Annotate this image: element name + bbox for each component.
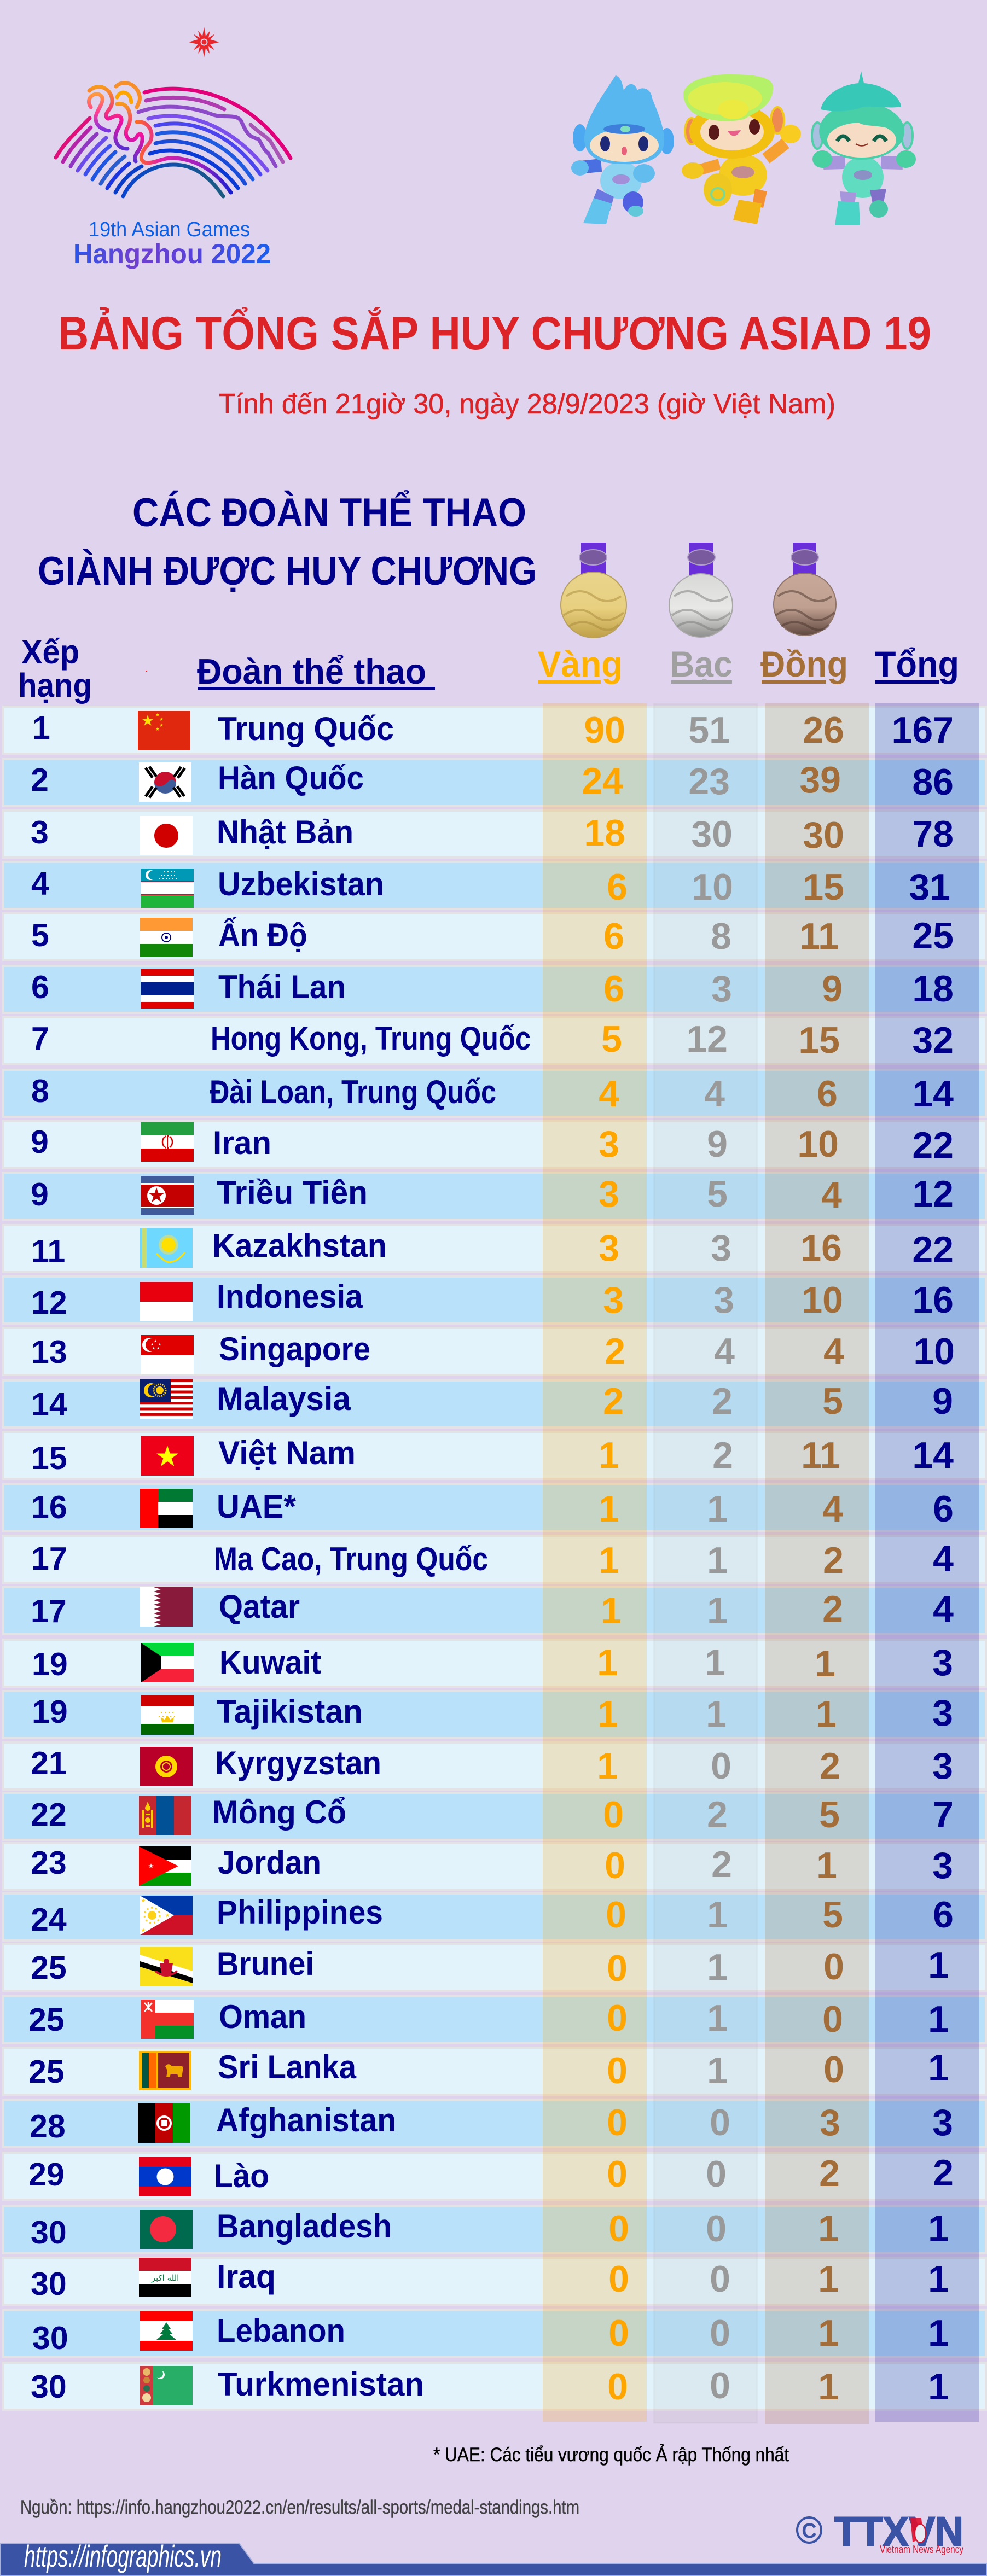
table row: Iraq: 0 <box>608 2258 629 2300</box>
table row: Singapore <box>31 1331 955 1374</box>
table row: Iran: Iran <box>213 1124 271 1161</box>
table row: Ấn Độ: 25 <box>912 915 954 957</box>
table row: Turkmenistan: 30 <box>31 2369 67 2405</box>
table row: Bangladesh: 1 <box>928 2208 949 2249</box>
table row: Afghanistan: 0 <box>710 2102 730 2143</box>
table row: Iraq: 1 <box>928 2258 949 2300</box>
table row: Việt Nam <box>31 1435 954 1476</box>
table row: Triều Tiên <box>31 1173 954 1216</box>
table row: Kyrgyzstan: 1 <box>597 1745 618 1787</box>
table row: Lào <box>28 2152 954 2196</box>
table row: UAE: 1 <box>599 1488 619 1530</box>
table row: Jordan: 3 <box>932 1845 953 1886</box>
icon: flag of Kazakhstan <box>140 1228 193 1268</box>
table row: Kyrgyzstan: 0 <box>711 1745 731 1787</box>
table row: Tajikistan: 1 <box>597 1693 618 1735</box>
table row: Đài Loan, Trung Quốc: Đài Loan, Trung Quốc <box>210 1074 496 1110</box>
table row: Ma Cao, Trung Quốc: 4 <box>933 1538 954 1580</box>
table row: Nhật Bản: 78 <box>912 813 954 855</box>
table row: Malaysia <box>31 1379 953 1423</box>
table row: Oman: 1 <box>928 1998 949 2040</box>
table row: UAE: 6 <box>933 1488 954 1530</box>
table row: Trung Quốc: 26 <box>803 709 844 751</box>
table row: Hong Kong, Trung Quốc <box>31 1018 954 1061</box>
icon: flag of Lebanon <box>140 2311 193 2351</box>
table row: UAE: 16 <box>31 1489 67 1525</box>
table row: Kazakhstan <box>31 1227 954 1270</box>
table row: Brunei: Brunei <box>217 1945 314 1982</box>
icon: flag of Mongolia <box>139 1796 191 1835</box>
table row: UAE: 4 <box>822 1488 843 1530</box>
table row: Sri Lanka: 1 <box>707 2050 728 2091</box>
table row: Kuwait: 1 <box>597 1642 618 1683</box>
icon: blue mascot <box>571 75 674 224</box>
table row: Afghanistan: 28 <box>30 2108 66 2144</box>
table row: Qatar: 1 <box>601 1590 622 1631</box>
icon: flag of Oman <box>141 2000 194 2039</box>
table row: Ấn Độ: 6 <box>603 916 624 957</box>
table row: Triều Tiên: 4 <box>821 1174 842 1216</box>
table row: Hàn Quốc: 2 <box>31 762 49 798</box>
table row: Philippines: 0 <box>606 1894 626 1936</box>
table row: Kyrgyzstan: 2 <box>820 1745 840 1787</box>
table row: Hong Kong, Trung Quốc: 5 <box>601 1018 622 1060</box>
table row: Oman: 0 <box>607 1997 628 2039</box>
icon: bronze medal <box>774 543 836 636</box>
table row: Đài Loan, Trung Quốc: 8 <box>31 1073 49 1109</box>
table row: Ma Cao, Trung Quốc: 2 <box>823 1540 844 1581</box>
table row: Afghanistan: 0 <box>607 2102 628 2143</box>
table row: Malaysia: 14 <box>31 1386 67 1423</box>
table row: Trung Quốc <box>32 709 954 751</box>
table row: Brunei: 0 <box>823 1946 844 1988</box>
table row: Trung Quốc: 1 <box>32 710 50 746</box>
column band: gold <box>543 703 647 2422</box>
table row: Kuwait: 3 <box>932 1642 953 1683</box>
logo: Hangzhou 2022 <box>56 83 291 269</box>
table row: Jordan: 23 <box>31 1845 67 1881</box>
table row: Đài Loan, Trung Quốc: 4 <box>599 1073 619 1115</box>
heading: participating delegations: GIÀNH ĐƯỢC HUY CHƯƠNG <box>38 549 537 593</box>
table row: Turkmenistan: 0 <box>710 2365 730 2406</box>
table row: Nhật Bản: 3 <box>31 814 49 850</box>
icon: flag of Kuwait <box>141 1643 194 1682</box>
column header: rank: hạng <box>18 667 92 704</box>
table row: Qatar: 4 <box>933 1588 954 1630</box>
table row: Singapore: 4 <box>714 1331 735 1372</box>
table row: Hàn Quốc: 24 <box>582 760 623 802</box>
table row: Mông Cổ: 7 <box>933 1794 954 1835</box>
icon: flag of Brunei <box>140 1947 193 1986</box>
table row: Jordan: 1 <box>816 1845 837 1886</box>
table row: Lào: 2 <box>933 2152 954 2194</box>
icon: flag of Qatar <box>140 1587 193 1627</box>
table row backgrounds <box>3 707 986 2410</box>
icon: flag of Afghanistan <box>138 2103 190 2143</box>
table row: Kazakhstan: 11 <box>31 1233 65 1269</box>
logo: TTXVN: Vietnam News Agency <box>880 2544 963 2556</box>
table row: Thái Lan: 6 <box>603 968 624 1010</box>
table row: Iraq: 30 <box>31 2266 67 2302</box>
table row: Mông Cổ: Mông Cổ <box>212 1794 346 1831</box>
table row: Tajikistan: 19 <box>32 1694 68 1730</box>
table row: Qatar: 17 <box>31 1593 67 1629</box>
table row: Philippines: 5 <box>822 1894 843 1936</box>
table row: Lebanon: 0 <box>608 2312 629 2354</box>
logo: Hangzhou 2022: 19th Asian Games <box>89 218 250 241</box>
table row: Jordan: 2 <box>711 1844 732 1885</box>
table row: Turkmenistan <box>31 2365 949 2408</box>
table row: Lào: 0 <box>607 2153 628 2195</box>
table row: Mông Cổ <box>31 1794 954 1835</box>
column header: rank: Xếp <box>21 633 79 671</box>
icon: flag of Iraq <box>139 2258 191 2297</box>
table row: Sri Lanka: Sri Lanka <box>218 2049 357 2085</box>
table row: Malaysia: Malaysia <box>217 1380 351 1417</box>
table row: Nhật Bản: Nhật Bản <box>217 814 353 850</box>
footnote: UAE: * UAE: Các tiểu vương quốc Ả rập Thống nhất <box>433 2444 789 2466</box>
table row: Kazakhstan: 3 <box>599 1227 619 1269</box>
icon: flag of Kyrgyzstan <box>140 1747 193 1786</box>
table row: Uzbekistan: 4 <box>31 866 49 902</box>
icon: flag of Japan <box>140 816 193 855</box>
table row: Hàn Quốc: Hàn Quốc <box>218 760 364 796</box>
table row: Trung Quốc: 51 <box>688 709 730 751</box>
table row: Sri Lanka: 25 <box>28 2054 65 2090</box>
table row: Bangladesh: 0 <box>706 2208 727 2249</box>
table row: Oman: 0 <box>822 1998 843 2040</box>
table row: Kazakhstan: 22 <box>912 1229 954 1270</box>
table row: Iran: 3 <box>599 1123 619 1165</box>
table row: Uzbekistan: 15 <box>803 866 844 908</box>
table row: Iran: 22 <box>912 1124 954 1166</box>
icon: flag of Bangladesh <box>140 2210 193 2249</box>
table row: Ma Cao, Trung Quốc: 17 <box>31 1541 67 1577</box>
icon: flag of South Korea <box>139 762 191 802</box>
table row: Mông Cổ: 0 <box>603 1794 624 1835</box>
table row: Triều Tiên: Triều Tiên <box>217 1174 368 1211</box>
table row: Iraq: 1 <box>818 2258 839 2300</box>
table row: Turkmenistan: Turkmenistan <box>218 2366 424 2403</box>
table row: Lào: Lào <box>214 2158 269 2194</box>
table row: Brunei <box>31 1944 949 1989</box>
table row: Việt Nam: 11 <box>801 1435 840 1476</box>
table row: Singapore: 4 <box>823 1331 844 1372</box>
table row: Ma Cao, Trung Quốc: Ma Cao, Trung Quốc <box>214 1541 488 1577</box>
table row: Tajikistan <box>32 1692 953 1735</box>
column band: silver <box>654 704 757 2423</box>
source line: Nguồn: https://info.hangzhou2022.cn/en/results/all-sports/medal-standings.htm <box>20 2497 579 2518</box>
table row: Jordan <box>31 1844 953 1886</box>
column header: delegation: Đoàn thể thao <box>197 651 426 691</box>
icon: flag of Uzbekistan <box>141 869 194 908</box>
icon: flag of Vietnam <box>141 1436 194 1476</box>
table row: Lào: 0 <box>706 2153 727 2195</box>
table row: Thái Lan <box>31 968 954 1010</box>
icon: flag of Thailand <box>141 969 194 1009</box>
table row: Hong Kong, Trung Quốc: Hong Kong, Trung Quốc <box>211 1020 531 1057</box>
table row: Nhật Bản: 18 <box>584 812 625 854</box>
table row: Kuwait <box>32 1642 953 1685</box>
table row: Ấn Độ: Ấn Độ <box>218 917 307 953</box>
table row: Brunei: 1 <box>707 1946 728 1988</box>
red dot artifact <box>146 671 147 672</box>
table row: Afghanistan <box>30 2102 953 2144</box>
table row: Kuwait: 1 <box>815 1643 835 1685</box>
table row: Lebanon: Lebanon <box>217 2312 345 2349</box>
table row: Kazakhstan: 3 <box>711 1227 731 1269</box>
table row: Ma Cao, Trung Quốc: 1 <box>599 1540 619 1581</box>
table row: Hong Kong, Trung Quốc: 32 <box>912 1019 954 1061</box>
table row: Iraq <box>31 2258 949 2302</box>
table row: Sri Lanka: 1 <box>928 2047 949 2089</box>
table row: Uzbekistan <box>31 866 950 908</box>
table row: Bangladesh: 30 <box>31 2214 67 2251</box>
table row: Lebanon: 1 <box>928 2312 949 2354</box>
table row: Thái Lan: Thái Lan <box>218 969 346 1005</box>
table row: Mông Cổ: 5 <box>819 1794 840 1835</box>
table row: Hàn Quốc: 23 <box>688 761 730 802</box>
table row: Triều Tiên: 3 <box>599 1173 619 1215</box>
table row: Ấn Độ: 5 <box>31 917 49 953</box>
table row: Turkmenistan: 1 <box>818 2366 839 2408</box>
column band: total <box>875 703 979 2422</box>
icon: flag of Laos <box>139 2157 191 2196</box>
column header: gold: Vàng <box>538 644 623 684</box>
table row: Lebanon <box>32 2311 949 2356</box>
table row: Uzbekistan: 10 <box>692 866 733 908</box>
column header: total: Tổng <box>875 644 959 684</box>
table row: Đài Loan, Trung Quốc: 6 <box>817 1073 838 1115</box>
table row: Malaysia: 2 <box>712 1380 733 1422</box>
table row: Lào: 29 <box>28 2157 65 2193</box>
icon: flag of Turkmenistan <box>140 2366 193 2405</box>
table row: Hàn Quốc: 39 <box>799 759 841 801</box>
table row: Kuwait: 1 <box>705 1642 725 1683</box>
table row: Sri Lanka: 0 <box>823 2049 844 2090</box>
table row: Kazakhstan: 16 <box>800 1227 842 1269</box>
table row: Brunei: 0 <box>607 1948 628 1989</box>
table row: Kyrgyzstan: 3 <box>932 1745 953 1787</box>
table row: Qatar: 2 <box>822 1588 843 1630</box>
table row: Turkmenistan: 1 <box>928 2366 949 2408</box>
table row: Indonesia: 3 <box>603 1279 624 1321</box>
table row: Triều Tiên: 12 <box>912 1173 954 1215</box>
table row: Lào: 2 <box>819 2153 840 2194</box>
table row: Đài Loan, Trung Quốc <box>31 1073 954 1115</box>
icon: flag of Tajikistan <box>141 1695 194 1735</box>
table row: Nhật Bản: 30 <box>691 813 733 855</box>
table row: Ma Cao, Trung Quốc <box>31 1538 954 1581</box>
icon: flag of Malaysia <box>140 1379 193 1419</box>
table row: Singapore: Singapore <box>219 1331 370 1367</box>
table row: Nhật Bản <box>31 812 954 856</box>
table row: Việt Nam: 14 <box>912 1435 954 1476</box>
table row: Philippines: Philippines <box>217 1894 383 1931</box>
logo: Hangzhou 2022: Hangzhou 2022 <box>73 238 271 269</box>
table row: Philippines: 24 <box>31 1902 67 1938</box>
table row: Philippines <box>31 1894 954 1938</box>
column band: bronze <box>765 703 869 2424</box>
table row: Qatar: Qatar <box>219 1588 300 1625</box>
table row: Ấn Độ <box>31 915 954 957</box>
icon: flag of India <box>140 918 193 957</box>
table row: Oman: Oman <box>219 1998 306 2035</box>
table row: Iran <box>31 1122 954 1166</box>
table row: Oman: 1 <box>707 1997 728 2039</box>
table row: Kyrgyzstan: 21 <box>31 1745 67 1781</box>
table row: Iran: 9 <box>31 1124 49 1160</box>
table row: Malaysia: 5 <box>822 1380 843 1422</box>
table row: UAE <box>31 1488 954 1530</box>
table row: Indonesia <box>31 1278 954 1321</box>
table row: Thái Lan: 9 <box>822 968 843 1010</box>
column header: silver: Bạc <box>670 644 733 684</box>
table row: Iran: 10 <box>797 1123 839 1165</box>
table row: Mông Cổ: 2 <box>707 1794 728 1835</box>
table row: Việt Nam: 1 <box>599 1435 619 1476</box>
table row: Đài Loan, Trung Quốc: 14 <box>912 1073 954 1115</box>
heading: participating delegations: CÁC ĐOÀN THỂ THAO <box>132 491 526 535</box>
table row: Hong Kong, Trung Quốc: 7 <box>31 1021 49 1057</box>
table row: Trung Quốc: 167 <box>892 709 954 751</box>
table row: Nhật Bản: 30 <box>803 814 844 856</box>
icon: green mascot <box>812 71 916 225</box>
table row: Thái Lan: 3 <box>711 968 732 1010</box>
table row: Brunei: 25 <box>31 1950 67 1986</box>
table row: Ấn Độ: 11 <box>799 916 839 957</box>
table row: Việt Nam: 2 <box>712 1435 733 1476</box>
table row: Tajikistan: 3 <box>932 1692 953 1734</box>
table row: Bangladesh: Bangladesh <box>217 2208 392 2245</box>
table row: Iraq: 0 <box>710 2258 730 2300</box>
table row: Lebanon: 1 <box>818 2312 839 2354</box>
table row: Bangladesh <box>31 2208 949 2251</box>
table row: Philippines: 6 <box>933 1894 954 1936</box>
table row: Lebanon: 0 <box>710 2312 730 2354</box>
table row: Oman <box>28 1997 949 2040</box>
table row: Kuwait: Kuwait <box>219 1644 321 1681</box>
icon: gold medal <box>561 543 626 638</box>
table row: Triều Tiên: 5 <box>707 1173 728 1215</box>
table row: Qatar: 1 <box>707 1590 728 1631</box>
table row: Lebanon: 30 <box>32 2320 68 2356</box>
table row: Iran: 9 <box>707 1123 728 1165</box>
table row: Iraq: Iraq <box>217 2258 276 2295</box>
table row: Bangladesh: 1 <box>818 2208 839 2249</box>
icon: flag of North Korea <box>141 1176 194 1215</box>
column header: rank <box>18 633 92 704</box>
icon: flag of Sri Lanka <box>139 2051 191 2090</box>
table row: Bangladesh: 0 <box>608 2208 629 2249</box>
table row: Việt Nam: 15 <box>31 1440 67 1476</box>
heading: participating delegations <box>38 491 537 593</box>
table row: Malaysia: 9 <box>932 1380 953 1422</box>
table row: Hong Kong, Trung Quốc: 12 <box>686 1018 728 1060</box>
table row: Sri Lanka: 0 <box>607 2050 628 2091</box>
table row: Jordan: 0 <box>605 1845 625 1886</box>
icon: silver medal <box>669 543 733 637</box>
table row: Hàn Quốc <box>31 759 954 803</box>
table row: Uzbekistan: 31 <box>909 866 950 908</box>
table row: Việt Nam: Việt Nam <box>218 1435 356 1471</box>
table row: Uzbekistan: Uzbekistan <box>218 866 384 902</box>
table row: Singapore: 10 <box>913 1331 955 1372</box>
table row: Indonesia: 3 <box>713 1279 734 1321</box>
table row: Đài Loan, Trung Quốc: 4 <box>704 1073 725 1115</box>
table row: Hong Kong, Trung Quốc: 15 <box>798 1019 840 1061</box>
table row: Philippines: 1 <box>707 1894 728 1936</box>
icon: flag of the Philippines <box>140 1896 193 1935</box>
logo: TTXVN: C <box>802 2520 817 2543</box>
table row: Uzbekistan: 6 <box>607 866 628 908</box>
table row: Kyrgyzstan: Kyrgyzstan <box>215 1745 381 1781</box>
table row: Jordan: Jordan <box>218 1844 321 1881</box>
table row: Sri Lanka <box>28 2047 949 2091</box>
table row: Thái Lan: 6 <box>31 969 49 1005</box>
table row: Turkmenistan: 0 <box>607 2366 628 2408</box>
table row: Brunei: 1 <box>928 1944 949 1986</box>
table row: UAE: UAE* <box>217 1488 297 1525</box>
table row: Tajikistan: 1 <box>706 1693 727 1735</box>
icon: Asian Games sun emblem <box>189 27 219 57</box>
footer bar: https://infographics.vn <box>24 2539 222 2573</box>
table row: Trung Quốc: 90 <box>584 709 625 751</box>
icon: flag of Singapore <box>141 1335 194 1374</box>
table row: Indonesia: 10 <box>802 1279 843 1321</box>
icon: flag of Iran <box>141 1122 194 1162</box>
icon: yellow mascot <box>682 74 801 224</box>
table row: Ma Cao, Trung Quốc: 1 <box>707 1540 728 1581</box>
table row: UAE: 1 <box>707 1488 728 1530</box>
table row: Afghanistan: 3 <box>932 2102 953 2143</box>
table row: Kazakhstan: Kazakhstan <box>212 1227 387 1264</box>
footer bar <box>0 2539 987 2576</box>
table row: Tajikistan: 1 <box>816 1693 837 1735</box>
table row: Indonesia: Indonesia <box>217 1278 363 1315</box>
icon: flag of Iraq: الله اكبر <box>151 2273 179 2283</box>
table row: Trung Quốc: Trung Quốc <box>218 710 394 747</box>
table row: Malaysia: 2 <box>603 1380 624 1422</box>
table row: Triều Tiên: 9 <box>31 1176 49 1213</box>
icon: flag of Indonesia <box>140 1282 193 1321</box>
subtitle: Tính đến 21giờ 30, ngày 28/9/2023 (giờ Việt Nam) <box>219 388 835 420</box>
table row: Indonesia: 12 <box>31 1285 67 1321</box>
table row: Mông Cổ: 22 <box>31 1797 67 1833</box>
table row: Afghanistan: Afghanistan <box>216 2102 396 2138</box>
table row: Hàn Quốc: 86 <box>912 761 954 803</box>
icon: flag of Jordan <box>139 1846 191 1886</box>
table row: Thái Lan: 18 <box>912 968 954 1010</box>
table row: Kyrgyzstan <box>31 1745 953 1787</box>
column header: bronze: Đồng <box>760 644 848 684</box>
table row: Oman: 25 <box>28 2002 65 2038</box>
table row: Afghanistan: 3 <box>820 2102 840 2143</box>
logo: TTXVN: TTXVN <box>834 2509 963 2555</box>
table row: Singapore: 13 <box>31 1334 67 1370</box>
icon: flag of China <box>138 711 190 750</box>
table row: Kuwait: 19 <box>32 1646 68 1682</box>
table row: Tajikistan: Tajikistan <box>217 1693 363 1730</box>
table row: Singapore: 2 <box>605 1331 625 1372</box>
table row: Qatar <box>31 1587 954 1631</box>
icon: flag of UAE <box>140 1489 193 1528</box>
table row: Indonesia: 16 <box>912 1279 954 1321</box>
table row: Ấn Độ: 8 <box>711 916 731 957</box>
